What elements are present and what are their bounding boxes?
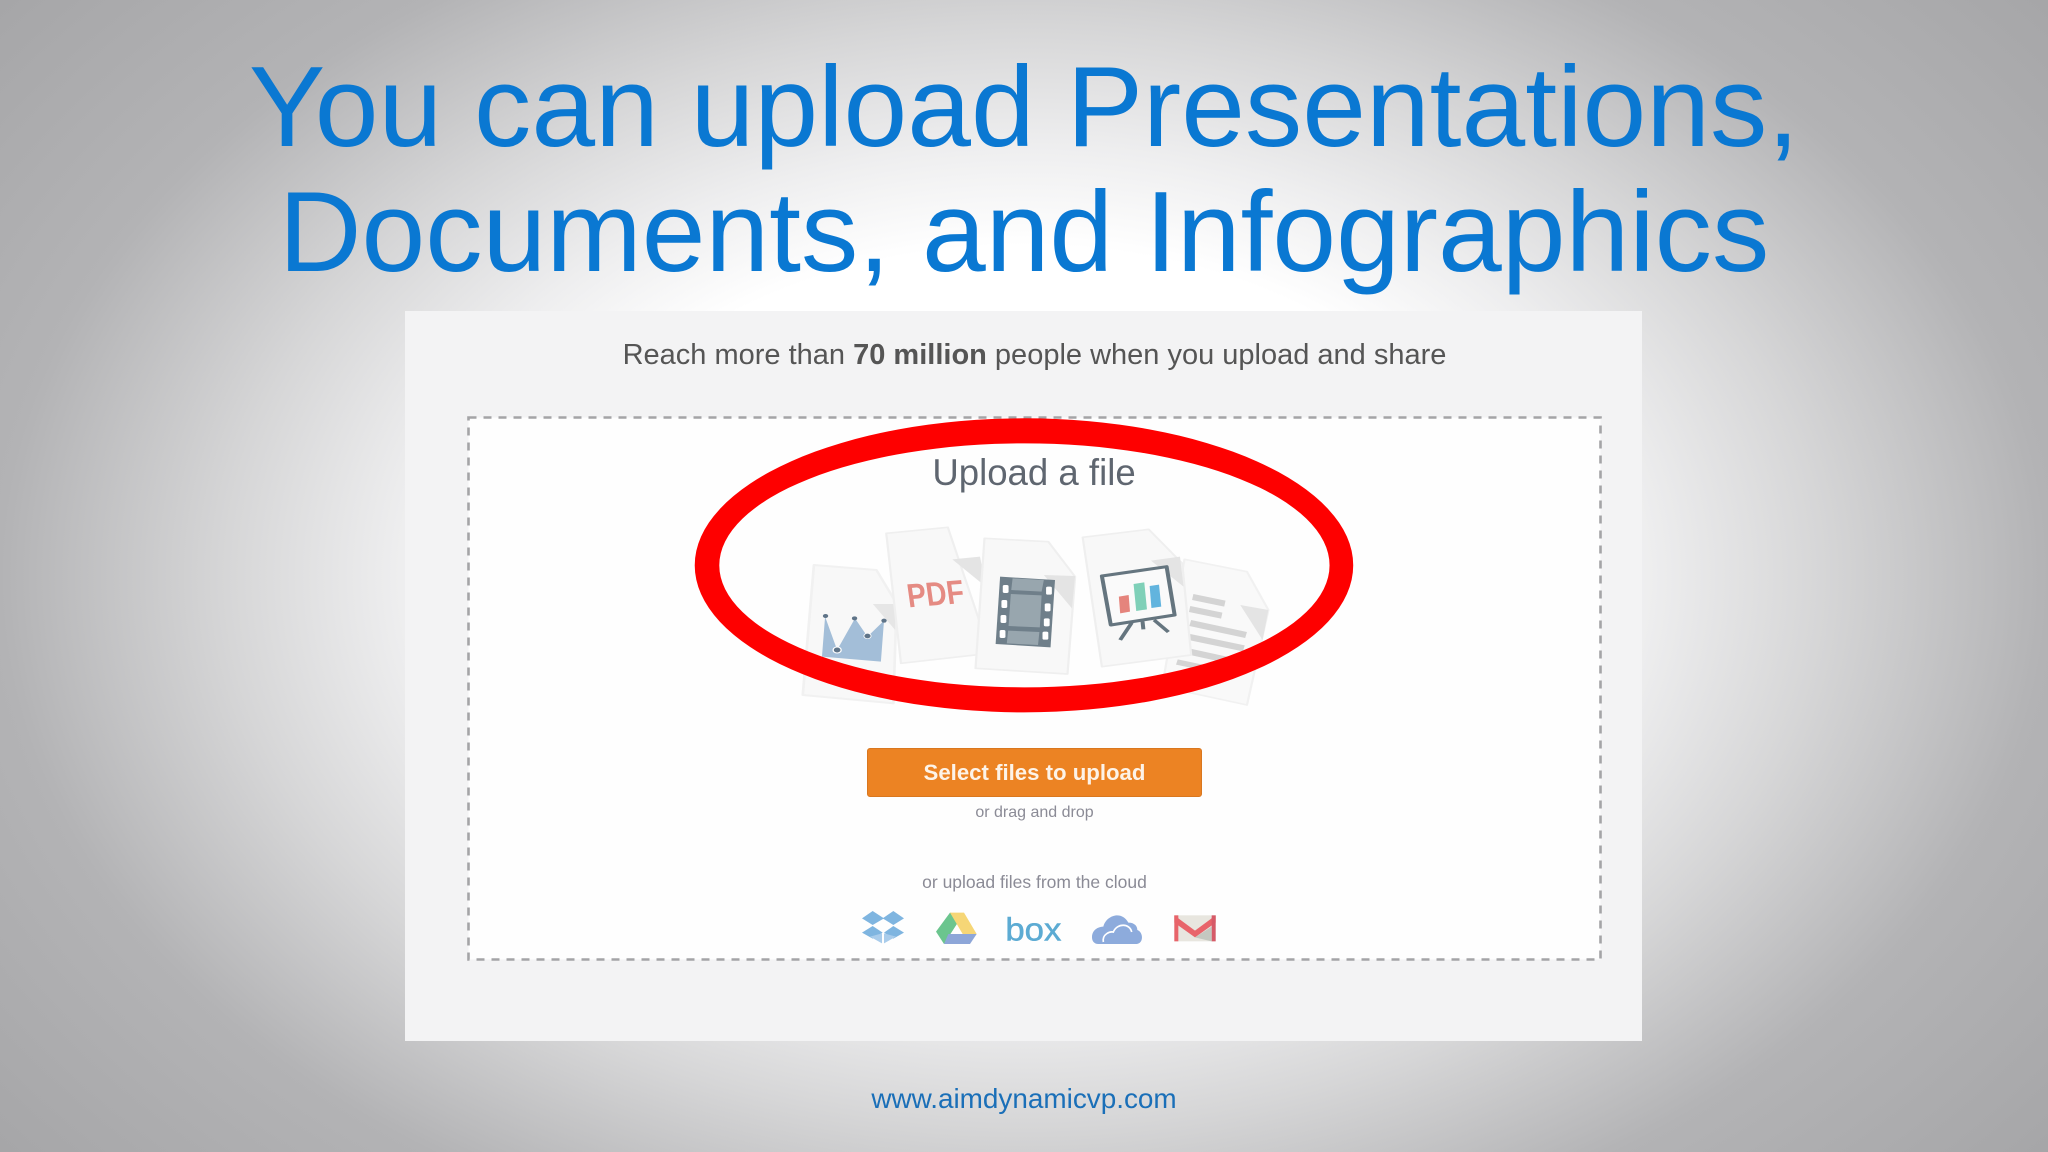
- title: You can upload Presentations,: [249, 43, 1799, 171]
- tagline: Reach more than 70 million people when you upload and share: [623, 339, 1446, 371]
- icon: google drive: [936, 913, 977, 944]
- icon: dropbox: [862, 911, 904, 943]
- icon: presentation document: [1083, 529, 1191, 667]
- heading: upload a file: Upload a file: [932, 452, 1136, 493]
- icon: text document: [1162, 559, 1268, 705]
- red ellipse highlight: [695, 418, 1353, 712]
- title: Documents, and Infographics: [279, 168, 1769, 296]
- icon: gmail: [1174, 915, 1216, 941]
- cloud service icons: [862, 911, 1216, 948]
- icon: onedrive: [1092, 915, 1142, 944]
- title: [249, 43, 1799, 296]
- button: select files: Select files to upload: [924, 760, 1145, 785]
- drag and drop note: or drag and drop: [975, 804, 1094, 821]
- icon: PDF document: [886, 527, 990, 663]
- icon: PDF document: PDF: [904, 573, 966, 615]
- panel: upload screenshot: [405, 311, 1642, 1041]
- illustration: file icons: [694, 418, 1354, 712]
- icon: chart document: [803, 565, 897, 703]
- icon: box: box: [1005, 912, 1061, 948]
- footer url: www.aimdynamicvp.com: [871, 1083, 1177, 1114]
- button: select files: [867, 748, 1202, 797]
- dashed upload zone: [467, 416, 1602, 961]
- icon: film document: [976, 538, 1075, 674]
- cloud upload note: or upload files from the cloud: [922, 872, 1147, 892]
